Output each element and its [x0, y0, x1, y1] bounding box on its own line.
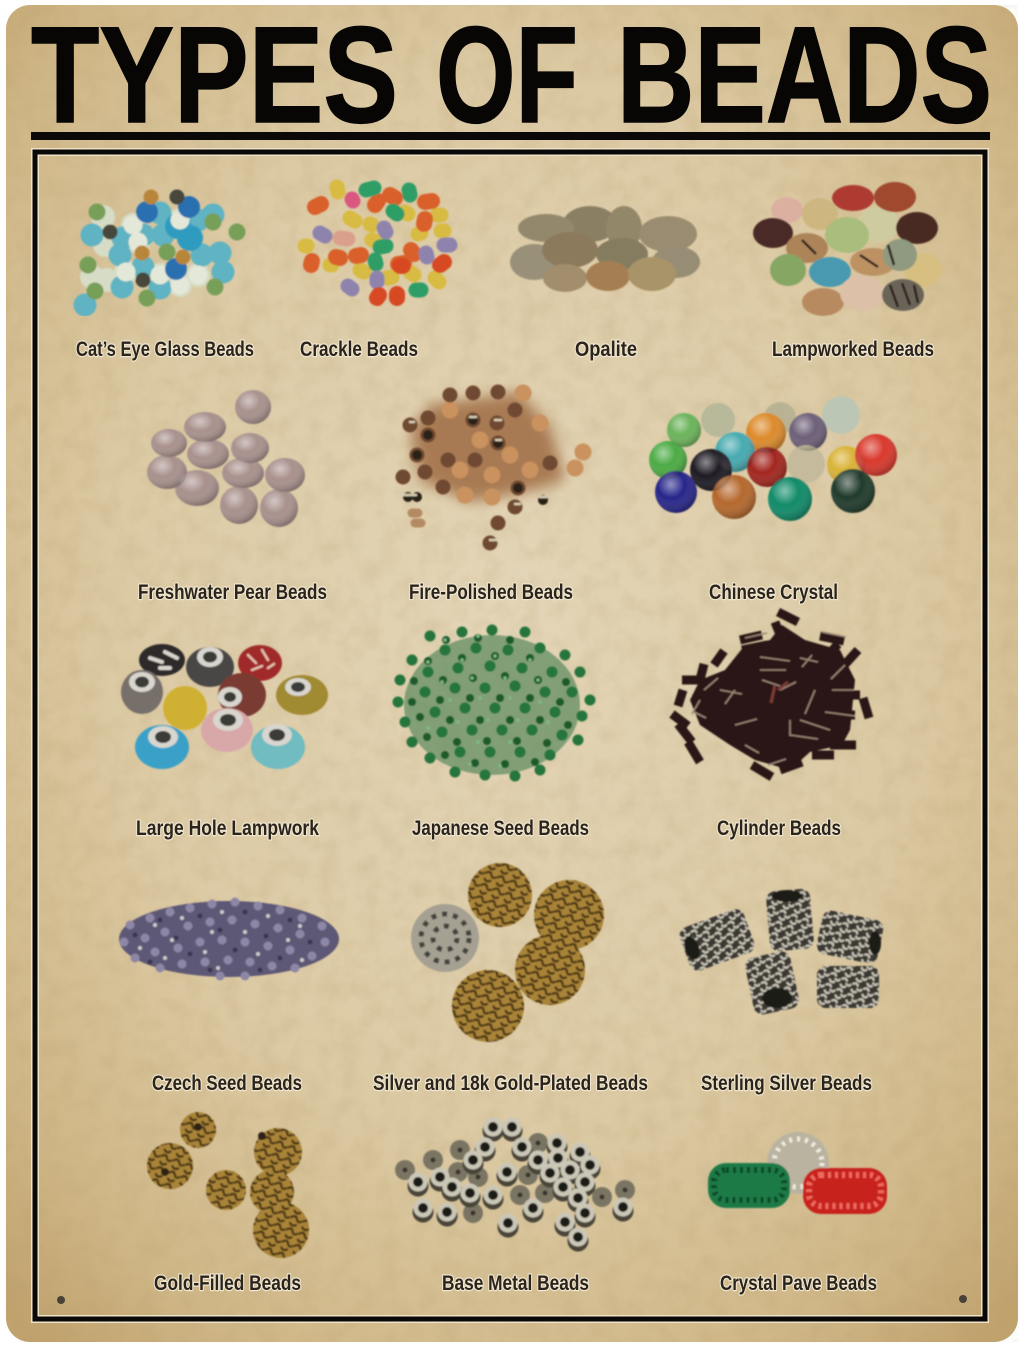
label: Chinese Crystal — [709, 581, 838, 604]
panel: Opalite — [510, 206, 700, 361]
title rule — [31, 132, 990, 140]
panel: Lampworked Beads — [753, 182, 942, 361]
panel: Japanese Seed Beads — [398, 630, 590, 840]
icon: pave beads — [708, 1132, 887, 1214]
icon: crackle beads — [305, 187, 450, 298]
panel: Base Metal Beads — [405, 1127, 625, 1295]
label: Cylinder Beads — [717, 817, 841, 840]
label: Silver and 18k Gold-Plated Beads — [373, 1072, 648, 1095]
icon: fire-polished beads — [400, 392, 583, 543]
panel: Freshwater Pear Beads — [138, 390, 327, 604]
icon: screw bottom right — [959, 1295, 967, 1303]
icon: silver tube beads — [677, 888, 885, 1016]
title: TYPES — [31, 0, 398, 152]
label: Sterling Silver Beads — [701, 1072, 872, 1095]
icon: gold and silver filigree beads — [411, 863, 604, 1042]
label: Czech Seed Beads — [152, 1072, 302, 1095]
panel: Sterling Silver Beads — [677, 888, 885, 1095]
title: OF — [436, 0, 578, 152]
panel: Cat's Eye Glass Beads — [76, 197, 254, 361]
icon: gold beads — [147, 1112, 309, 1258]
icon: large hole lampwork beads — [121, 644, 328, 769]
panel: Gold-Filled Beads — [147, 1112, 309, 1295]
label: Opalite — [575, 338, 637, 361]
panel: Czech Seed Beads — [119, 901, 339, 1095]
icon: pearl beads — [147, 390, 305, 527]
label: Large Hole Lampwork — [136, 817, 319, 840]
label: Fire-Polished Beads — [409, 581, 573, 604]
label: Lampworked Beads — [772, 338, 934, 361]
panel: Crackle Beads — [300, 187, 450, 361]
icon: opalite beads — [510, 206, 700, 292]
icon: crystal beads — [649, 396, 897, 521]
icon: seed beads — [398, 630, 590, 776]
icon: screw bottom left — [57, 1296, 65, 1304]
label: Gold-Filled Beads — [154, 1272, 301, 1295]
icon: cat's eye beads — [85, 197, 237, 305]
label: Cat’s Eye Glass Beads — [76, 338, 254, 361]
title — [31, 0, 992, 152]
icon: cylinder beads — [672, 612, 869, 777]
icon: base metal beads — [405, 1127, 625, 1241]
panel: Chinese Crystal — [649, 396, 897, 604]
label: Freshwater Pear Beads — [138, 581, 327, 604]
icon: Czech seed beads — [119, 901, 339, 977]
panel: Silver and 18k Gold-Plated Beads — [373, 863, 648, 1095]
panel: Cylinder Beads — [672, 612, 869, 840]
label: Crackle Beads — [300, 338, 418, 361]
icon: lampworked beads — [753, 182, 942, 316]
panel: Fire-Polished Beads — [400, 392, 583, 604]
label: Japanese Seed Beads — [412, 817, 589, 840]
label: Base Metal Beads — [442, 1272, 589, 1295]
label: Crystal Pave Beads — [720, 1272, 877, 1295]
panel: Large Hole Lampwork — [121, 644, 328, 840]
panel: Crystal Pave Beads — [708, 1132, 887, 1295]
frame — [35, 152, 985, 1319]
